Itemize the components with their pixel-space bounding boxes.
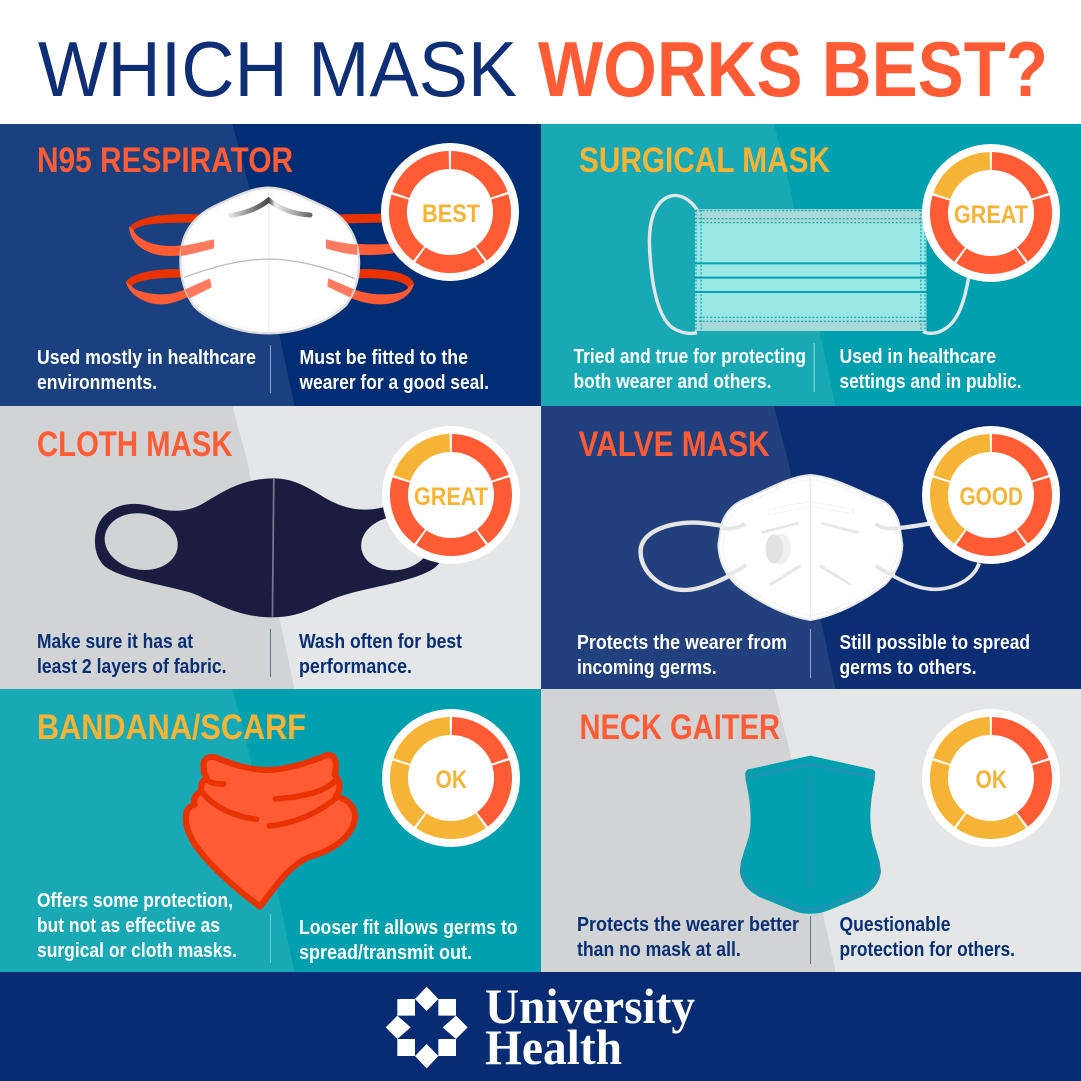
text: N95 usage: Used mostly in healthcare <box>37 347 256 369</box>
heading: bandana or scarf: BANDANA/SCARF <box>37 708 306 747</box>
panel: bandana or scarf <box>0 689 541 972</box>
text: N95 usage: environments. <box>37 372 157 394</box>
panel: N95 respirator <box>0 124 541 406</box>
icon: N95 mask <box>126 188 414 333</box>
icon: bandana <box>186 755 355 907</box>
text: cloth layers: Make sure it has at <box>37 631 193 653</box>
panel: cloth mask <box>0 406 541 689</box>
text: bandana protection: surgical or cloth masks. <box>37 940 237 962</box>
text: N95 fit: Must be fitted to the <box>300 347 468 369</box>
footer <box>0 972 1081 1081</box>
text: valve spread: Still possible to spread <box>840 632 1030 654</box>
text: gaiter others: protection for others. <box>840 939 1015 961</box>
rating ring: best <box>377 139 523 285</box>
logo wordmark: Health <box>485 1019 622 1075</box>
text: bandana protection: but not as effective as <box>37 915 220 937</box>
heading: neck gaiter: NECK GAITER <box>580 708 780 747</box>
rating ring: ok <box>378 705 524 851</box>
text: cloth washing: Wash often for best <box>299 631 462 653</box>
icon: neck gaiter <box>740 756 881 914</box>
rating ring: great <box>918 140 1064 286</box>
text: surgical settings: settings and in public. <box>840 371 1022 393</box>
text: valve protection: Protects the wearer from <box>577 632 787 654</box>
text: cloth washing: performance. <box>299 656 412 678</box>
rating ring: ok <box>918 705 1064 851</box>
text: gaiter others: Questionable <box>840 914 950 936</box>
panel: valve mask <box>541 406 1081 689</box>
title <box>38 25 1048 113</box>
heading: N95 respirator: N95 RESPIRATOR <box>37 141 293 180</box>
text: bandana fit: spread/transmit out. <box>299 942 472 964</box>
rating ring: good: GOOD <box>960 483 1023 511</box>
text: surgical protection: both wearer and others. <box>574 371 772 393</box>
rating ring: best: BEST <box>422 200 480 228</box>
icon: surgical mask <box>649 196 969 333</box>
icon: University Health logo <box>386 987 468 1068</box>
text: gaiter protection: than no mask at all. <box>577 939 741 961</box>
text: bandana fit: Looser fit allows germs to <box>299 917 518 939</box>
heading: surgical mask: SURGICAL MASK <box>579 141 830 180</box>
rating ring: ok: OK <box>976 766 1007 794</box>
logo wordmark: University <box>485 978 695 1034</box>
heading: cloth mask: CLOTH MASK <box>37 425 232 464</box>
text: valve protection: incoming germs. <box>577 657 717 679</box>
title: WHICH MASK <box>38 25 517 113</box>
panel: surgical mask <box>541 124 1081 406</box>
text: valve spread: germs to others. <box>840 657 976 679</box>
panel: neck gaiter <box>541 689 1081 972</box>
rating ring: good <box>918 422 1064 568</box>
text: surgical protection: Tried and true for protecting <box>574 346 806 368</box>
text: gaiter protection: Protects the wearer better <box>577 914 799 936</box>
rating ring: ok: OK <box>436 766 467 794</box>
text: surgical settings: Used in healthcare <box>840 346 996 368</box>
rating ring: great: GREAT <box>954 201 1028 229</box>
text: N95 fit: wearer for a good seal. <box>299 372 489 394</box>
text: bandana protection: Offers some protection, <box>37 890 233 912</box>
heading: valve mask: VALVE MASK <box>578 425 770 464</box>
text: cloth layers: least 2 layers of fabric. <box>37 656 226 678</box>
rating ring: great: GREAT <box>414 483 488 511</box>
icon: cloth mask <box>95 478 444 617</box>
icon: valve mask <box>641 475 979 620</box>
rating ring: great <box>378 422 524 568</box>
